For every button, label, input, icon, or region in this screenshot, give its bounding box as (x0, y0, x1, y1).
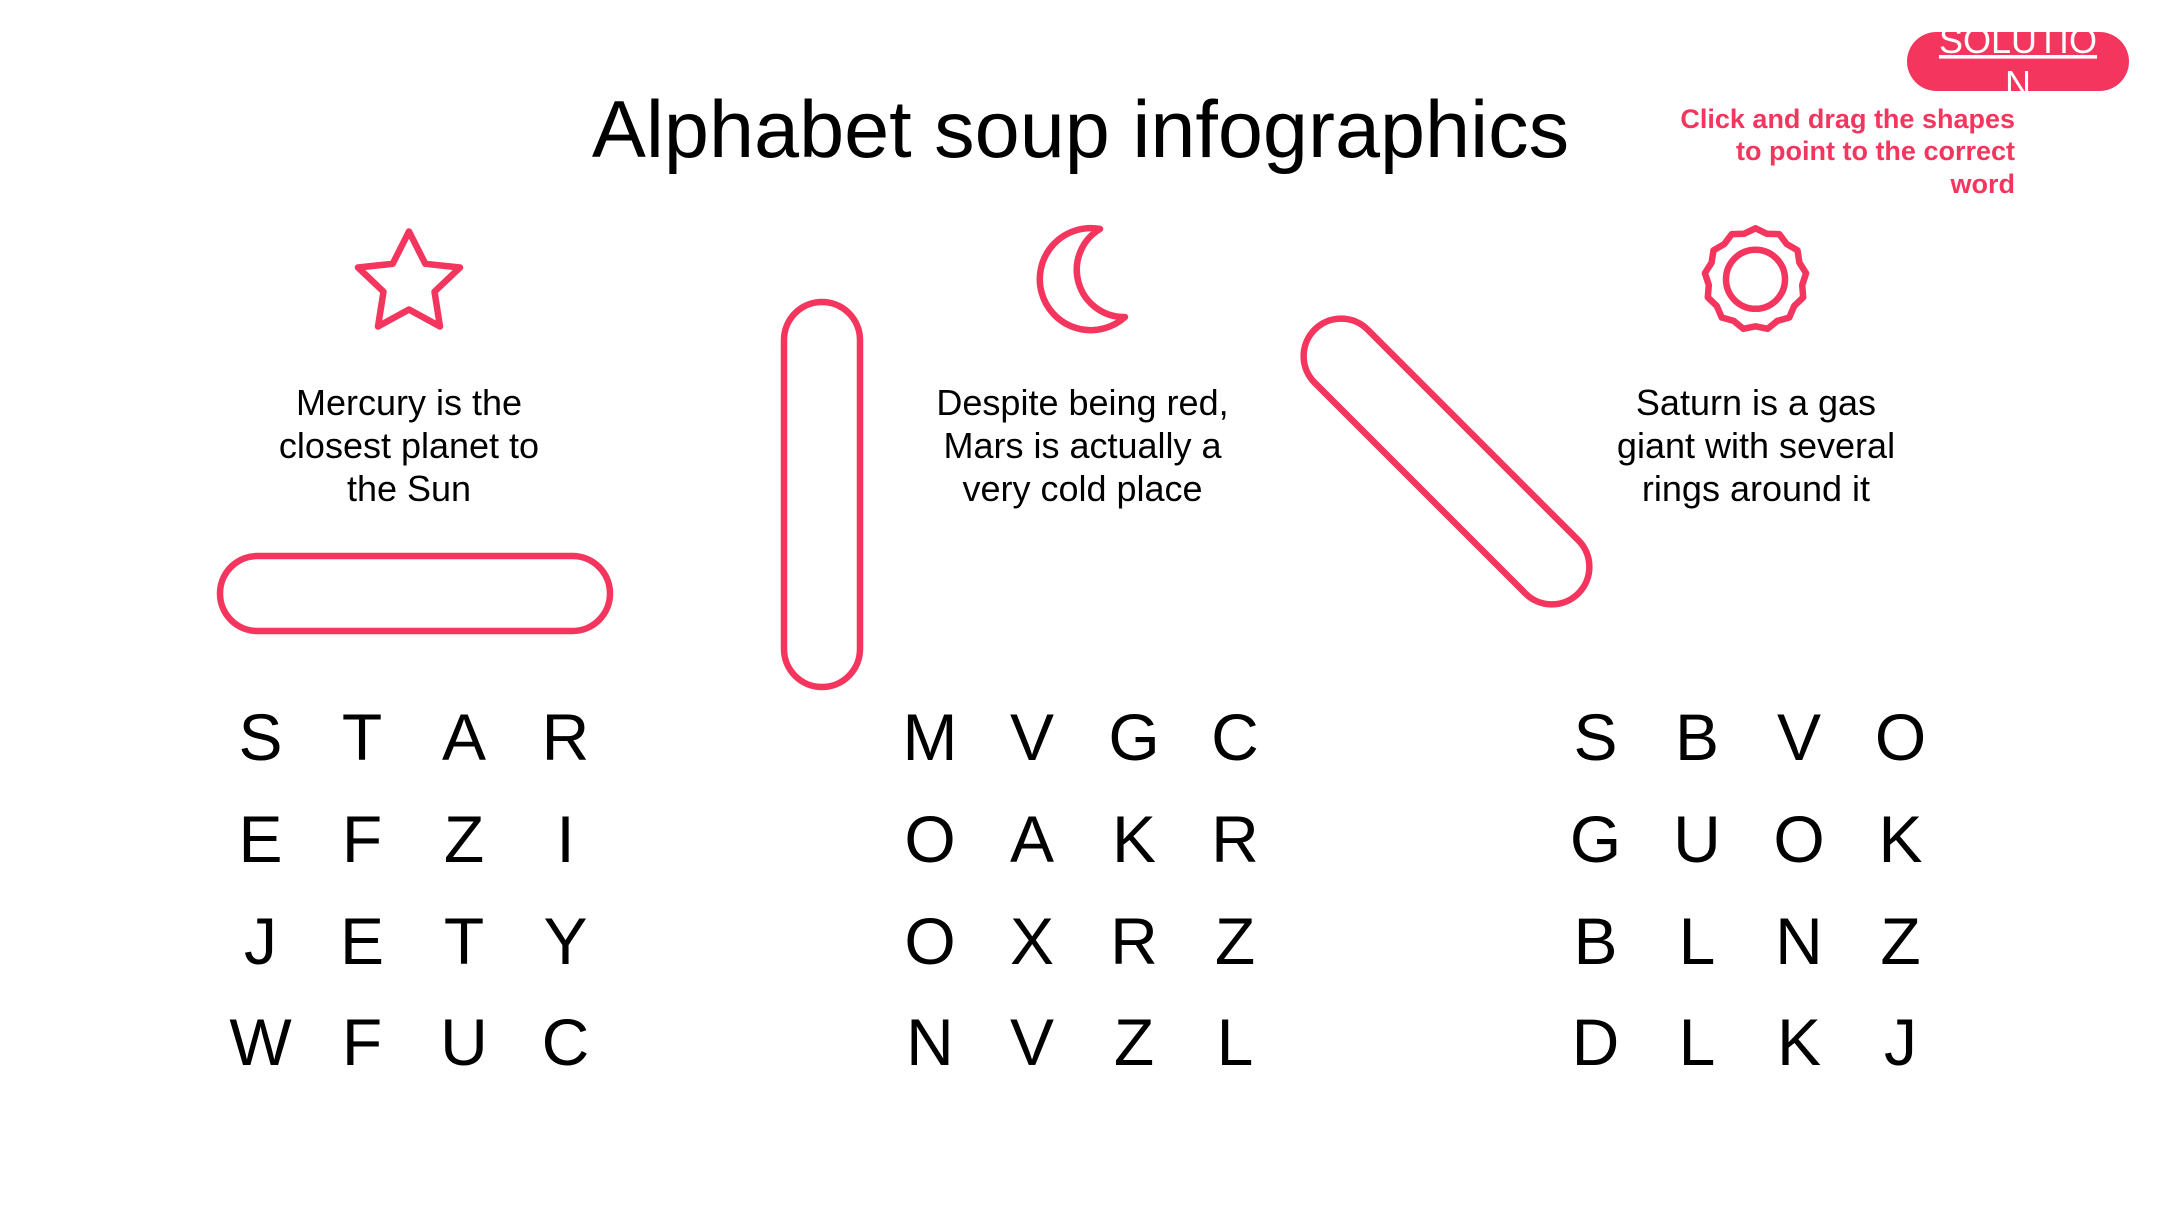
letter grid: Saturn (1570, 700, 1926, 1079)
letter grid: Saturn: K (1878, 802, 1923, 876)
letter grid: Mercury: F (342, 1005, 382, 1079)
letter grid: Mercury: R (542, 700, 589, 774)
icon: star (358, 232, 460, 326)
description: Mars: Mars is actually a (943, 425, 1223, 466)
letter grid: Saturn: Z (1880, 904, 1921, 978)
letter grid: Mercury: Y (543, 904, 588, 978)
letter grid: Saturn: V (1777, 700, 1821, 774)
letter grid: Mercury: A (442, 700, 486, 774)
letter grid: Saturn: J (1884, 1005, 1917, 1079)
description: Mars: very cold place (962, 468, 1203, 509)
infographic canvas (216, 32, 2129, 1066)
letter grid: Mars (903, 700, 1259, 1079)
description: Saturn (1617, 382, 1895, 509)
letter grid: Mercury (229, 700, 589, 1079)
letter grid: Mercury: U (440, 1005, 488, 1079)
instruction text: to point to the correct (1736, 136, 2015, 166)
letter grid: Saturn: O (1875, 700, 1926, 774)
letter grid: Mercury: E (238, 802, 283, 876)
letter grid: Saturn: S (1573, 700, 1618, 774)
draggable pill: diagonal (1288, 303, 1605, 620)
letter grid: Mars: R (1211, 802, 1259, 876)
letter grid: Saturn: G (1570, 802, 1621, 876)
letter grid: Mars: V (1010, 700, 1054, 774)
letter grid: Mercury: E (340, 904, 384, 978)
instruction text (1680, 104, 2015, 199)
instruction text: Click and drag the shapes (1680, 104, 2015, 134)
letter grid: Saturn: L (1679, 904, 1715, 978)
letter grid: Mercury: I (556, 802, 575, 876)
letter grid: Mercury: F (342, 802, 382, 876)
description: Mars (936, 382, 1229, 509)
letter grid: Mars: N (906, 1005, 954, 1079)
letter grid: Mars: Z (1114, 1005, 1154, 1079)
letter grid: Saturn: D (1572, 1005, 1619, 1079)
title: Alphabet soup infographics (592, 85, 1569, 175)
icon: moon (1040, 228, 1125, 330)
letter grid: Mercury: T (444, 904, 484, 978)
description: Mercury: Mercury is the (296, 382, 522, 423)
letter grid: Mercury: Z (444, 802, 484, 876)
letter grid: Mercury: J (244, 904, 277, 978)
letter grid: Mercury: W (229, 1005, 292, 1079)
description: Saturn: rings around it (1642, 468, 1870, 509)
letter grid: Mars: L (1217, 1005, 1253, 1079)
draggable pill: vertical (784, 302, 860, 687)
letter grid: Mars: M (903, 700, 957, 774)
letter grid: Mars: G (1108, 700, 1160, 774)
letter grid: Mercury: T (342, 700, 382, 774)
letter grid: Mars: Z (1215, 904, 1255, 978)
letter grid: Mercury: C (542, 1005, 589, 1079)
letter grid: Mars: C (1211, 700, 1259, 774)
letter grid: Saturn: B (1675, 700, 1719, 774)
instruction text: word (1950, 169, 2015, 199)
solution button: N (2005, 63, 2031, 104)
description: Mercury (279, 382, 539, 509)
letter grid: Mars: O (904, 904, 956, 978)
letter grid: Saturn: L (1679, 1005, 1715, 1079)
description: Mercury: closest planet to (279, 425, 539, 466)
icon: sun (1705, 228, 1806, 329)
letter grid: Mars: V (1010, 1005, 1054, 1079)
letter grid: Saturn: N (1775, 904, 1823, 978)
letter grid: Saturn: O (1773, 802, 1825, 876)
solution button: SOLUTIO (1939, 20, 2097, 61)
letter grid: Mars: A (1010, 802, 1054, 876)
solution button (1907, 32, 2129, 91)
description: Saturn: Saturn is a gas (1636, 382, 1876, 423)
letter grid: Saturn: U (1673, 802, 1721, 876)
description: Mars: Despite being red, (936, 382, 1229, 423)
letter grid: Saturn: K (1777, 1005, 1821, 1079)
letter grid: Mars: R (1110, 904, 1158, 978)
letter grid: Mercury: S (238, 700, 283, 774)
letter grid: Mars: K (1112, 802, 1156, 876)
description: Mercury: the Sun (347, 468, 471, 509)
letter grid: Mars: O (904, 802, 956, 876)
letter grid: Mars: X (1010, 904, 1054, 978)
draggable pill: horizontal (220, 556, 610, 631)
description: Saturn: giant with several (1617, 425, 1895, 466)
letter grid: Saturn: B (1573, 904, 1618, 978)
